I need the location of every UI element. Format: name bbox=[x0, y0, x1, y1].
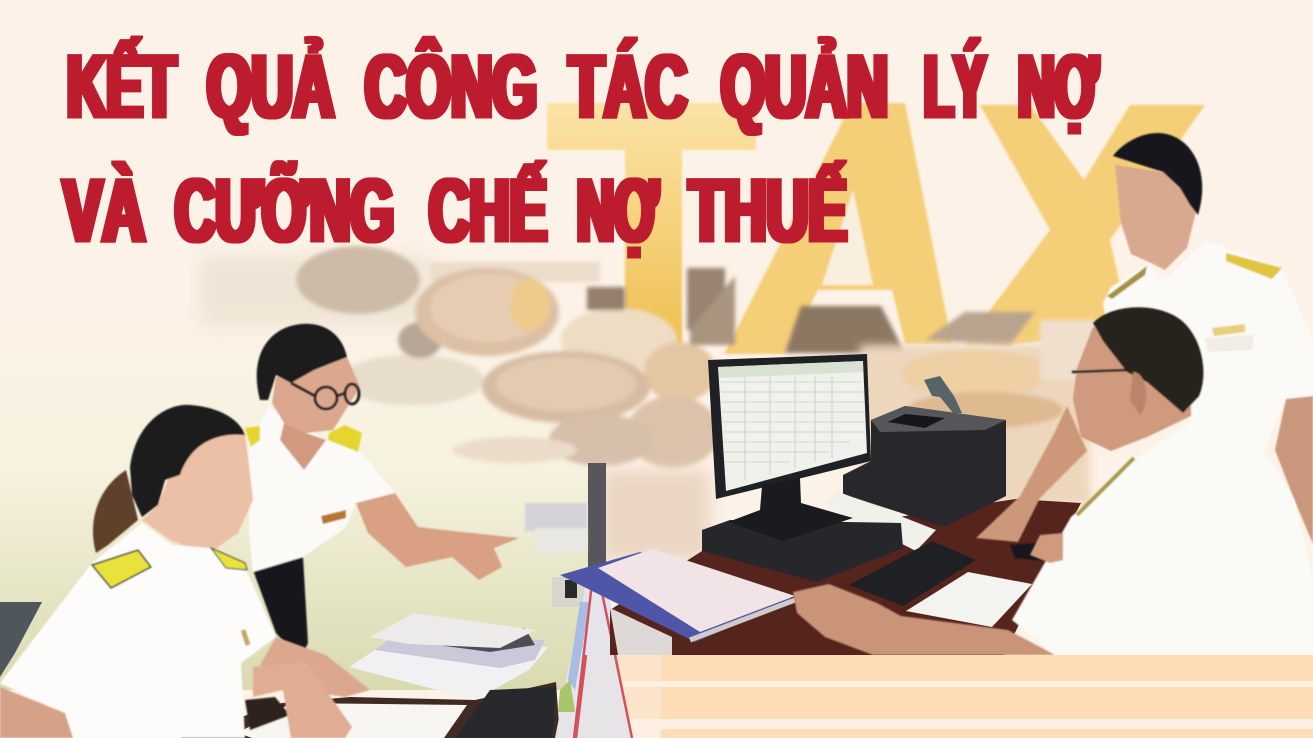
title line 2: THUẾ bbox=[689, 160, 847, 260]
keyboard and papers bbox=[849, 541, 1032, 627]
TAX letters bbox=[547, 103, 1205, 354]
title line 1: KẾT bbox=[67, 36, 176, 136]
title line 1: QUẢN bbox=[721, 36, 888, 136]
title line 1: QUẢ bbox=[207, 36, 334, 136]
person: seated man bbox=[793, 307, 1313, 655]
title line 2: VÀ bbox=[63, 160, 145, 260]
white sheet bbox=[821, 492, 936, 551]
title line 2: NỢ bbox=[577, 160, 658, 260]
coins bbox=[200, 246, 1100, 560]
person: standing woman bbox=[245, 324, 519, 660]
title line 1 bbox=[67, 36, 1098, 136]
title line 2: CHẾ bbox=[429, 160, 547, 260]
title line 2 bbox=[63, 160, 847, 260]
title line 1: CÔNG bbox=[365, 36, 537, 136]
documents on left desk bbox=[180, 613, 560, 738]
title line 1: TÁC bbox=[569, 36, 687, 136]
title line 1: NỢ bbox=[1018, 36, 1098, 136]
computer monitor bbox=[708, 354, 871, 541]
person: standing man bbox=[976, 133, 1313, 562]
printer bbox=[843, 376, 1006, 527]
left office details bbox=[0, 463, 606, 677]
title line 1: LÝ bbox=[924, 36, 986, 136]
right desk bbox=[610, 499, 1081, 655]
folder bbox=[560, 549, 795, 655]
title bbox=[63, 36, 1098, 260]
desk partition bbox=[555, 572, 632, 738]
person: seated woman bbox=[0, 405, 370, 738]
computer tower bbox=[702, 520, 903, 582]
title line 2: CƯỠNG bbox=[175, 160, 394, 260]
bottom right stripes bbox=[576, 655, 1313, 738]
